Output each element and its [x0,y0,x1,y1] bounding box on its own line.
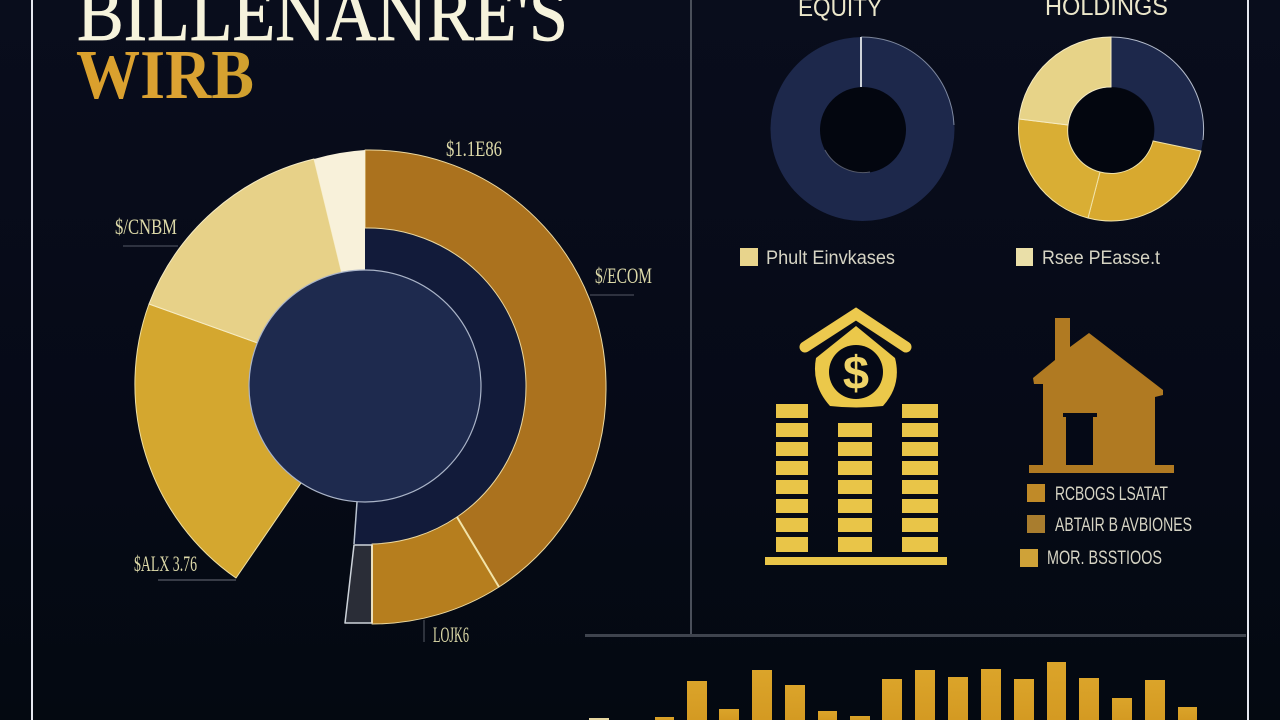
label: left value [115,214,178,246]
segment: gold left [1019,119,1100,218]
label: top value: $1.1E86 [446,136,502,161]
center circle [249,270,481,502]
segment: brown large [365,150,606,587]
label: right value: $/ECOM [595,263,652,288]
icon: house [1029,318,1174,473]
legend item 2 [1027,515,1192,536]
subtitle: WIRB [76,37,254,114]
icon: roof [805,314,906,347]
legend item 2: ABTAIR B AVBIONES [1055,515,1192,536]
icon: shield with dollar [815,326,897,408]
segment: pale [1019,37,1111,125]
segment: gold right [1088,141,1201,221]
legend item 3 [1020,548,1162,569]
label: bottom value: LOJK6 [433,622,469,647]
segment: navy ring [354,228,526,545]
title [76,0,568,114]
segment: navy [1111,37,1204,151]
icon: shield with dollar: $ [843,346,869,399]
legend: equity: Phult Einvkases [766,248,895,269]
label: bottom value [424,620,469,647]
door [1063,413,1097,465]
segment: brown small [372,517,499,624]
legend item 1 [1027,484,1168,505]
coin stack: middle [838,423,872,552]
label: right value [590,263,652,295]
bar chart [589,662,1197,720]
chart: main wealth donut [135,150,606,624]
coin stack: right [902,404,938,552]
legend item 1: RCBOGS LSATAT [1055,484,1168,505]
segment: dark sliver [345,545,372,623]
label: bottom left value: $ALX 3.76 [134,551,197,576]
segment: cream [314,150,365,386]
legend: property [1020,484,1192,569]
segment: gold [135,304,365,578]
icon: bank with coin stacks [765,314,947,565]
chart: equity donut [770,37,954,221]
legend item 3: MOR. BSSTIOOS [1047,548,1162,569]
base bar [765,557,947,565]
segment: pale gold [149,159,365,386]
label: left value: $/CNBM [115,214,177,239]
coin stack: left [776,404,808,552]
legend: holdings: Rsee PEasse.t [1042,248,1161,269]
chart: holdings donut [1019,37,1204,221]
